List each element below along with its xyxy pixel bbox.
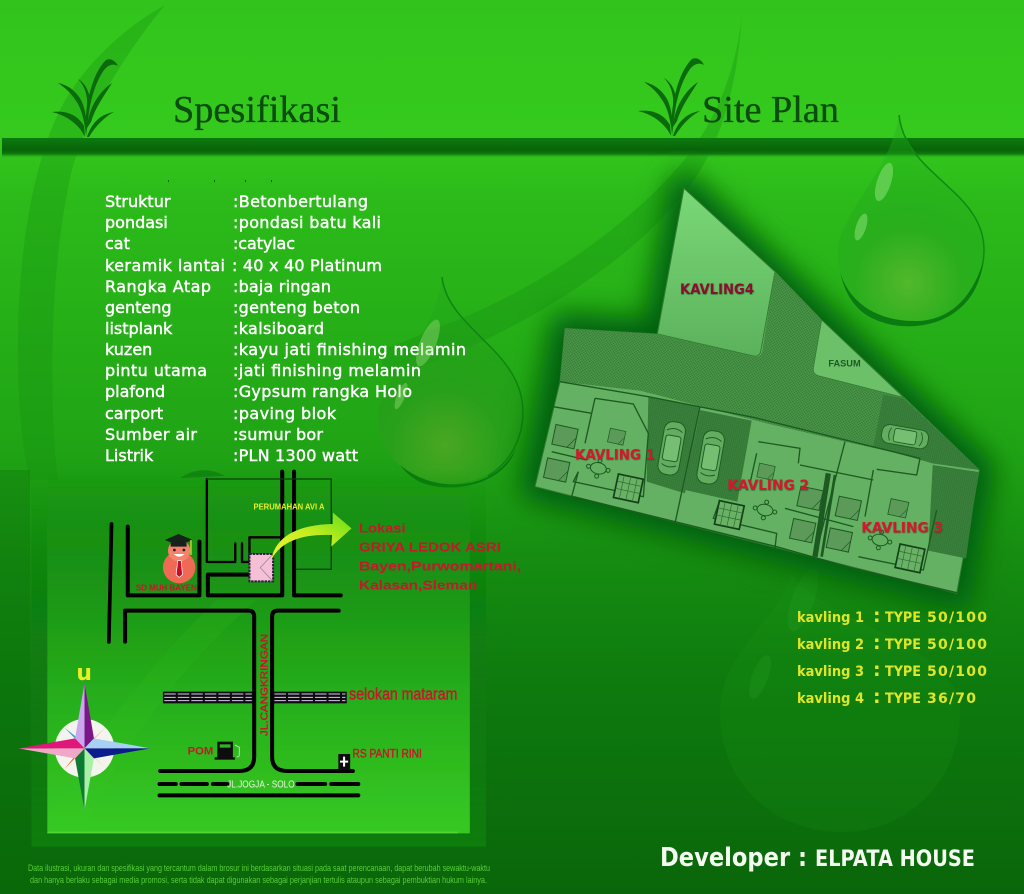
kavling type list: :: [873, 659, 881, 681]
label: selokan mataram: selokan mataram: [349, 684, 457, 703]
specification list: :baja ringan: [233, 277, 331, 296]
icon: graduate mascot school: [163, 534, 195, 583]
header divider bar: [2, 138, 1024, 158]
kavling type list: 50/100: [927, 664, 987, 680]
specification list: :pondasi batu kali: [233, 213, 381, 232]
label: Fasum: FASUM: [828, 359, 861, 369]
paved road: [560, 272, 979, 470]
water drop highlights over text: [392, 317, 445, 410]
kavling type list: TYPE: [885, 664, 921, 680]
kavling type list: kavling 3: [797, 664, 864, 680]
carport areas: [647, 395, 979, 558]
specification list: :genteng beton: [233, 298, 360, 317]
kavling type list: 36/70: [927, 691, 976, 707]
icon: hospital cross: [338, 754, 350, 770]
specification list: keramik lantai: [105, 256, 225, 275]
label: Kavling 3: KAVLING 3: [861, 521, 943, 537]
specification list: pintu utama: [105, 361, 207, 380]
disclaimer: [28, 863, 490, 886]
label: RS Panti Rini: RS PANTI RINI: [353, 747, 422, 761]
label: Kavling 1: KAVLING 1: [575, 447, 655, 463]
panel: site plan: [535, 188, 979, 593]
heading: Spesifikasi: Spesifikasi: [173, 89, 341, 131]
kavling type list: kavling 4: [797, 691, 864, 707]
map backdrop: [31, 470, 486, 847]
specification list: :paving blok: [233, 404, 337, 423]
location text: GRIYA LEDOK ASRI: [359, 539, 501, 554]
label: Jl Cangkringan: JL.CANGKRINGAN: [259, 634, 270, 736]
specification list: listplank: [105, 319, 173, 338]
faint large water drop bottom right: [720, 565, 960, 832]
icon: site location square: [249, 554, 273, 581]
furniture: [544, 425, 925, 573]
kavling type list: :: [873, 605, 881, 627]
kavling type list: TYPE: [885, 637, 921, 653]
specification list: Rangka Atap: [105, 277, 211, 296]
specification list: : 40 x 40 Platinum: [232, 256, 382, 275]
specification list: [105, 192, 466, 465]
kavling type list: 50/100: [927, 610, 987, 626]
specification list: :kayu jati finishing melamin: [233, 340, 466, 359]
developer credit: [660, 843, 975, 873]
cars: [657, 420, 930, 485]
tiny specks above the specification list: [168, 180, 272, 182]
specification list: Struktur: [105, 192, 171, 211]
label: Kavling 2: KAVLING 2: [727, 478, 809, 494]
water drop behind specification list: [378, 277, 523, 487]
specification list: genteng: [105, 298, 172, 317]
location text: Lokasi: [359, 521, 406, 536]
specification list: :Gypsum rangka Holo: [233, 382, 412, 401]
specification list: pondasi: [105, 213, 168, 232]
specification list: :Betonbertulang: [233, 192, 368, 211]
specification list: :jati finishing melamin: [233, 361, 421, 380]
developer credit: ELPATA HOUSE: [815, 847, 975, 872]
disclaimer: Data ilustrasi, ukuran dan spesifikasi yang tercantum dalam brosur ini berdasarkan situasi pada saat perencanaan, dapat berubah sewaktu-waktu: [28, 863, 490, 874]
specification list: :sumur bor: [233, 425, 323, 444]
canal: selokan mataram: [163, 692, 347, 703]
location text: Kalasan,Sleman: [359, 577, 477, 592]
kavling type list: 50/100: [927, 637, 987, 653]
icon: fuel pump: [215, 742, 239, 760]
heading: Site Plan: Site Plan: [702, 89, 839, 131]
specification list: plafond: [105, 382, 165, 401]
specification list: Sumber air: [105, 425, 197, 444]
icon: plant right: [638, 58, 704, 136]
developer credit: Developer :: [660, 843, 807, 873]
specification list: :PLN 1300 watt: [233, 446, 358, 465]
location text: Bayen,Purwomartani,: [359, 558, 521, 573]
house walls: [552, 382, 957, 593]
label: SD Muh Bayen: SD MUH BAYEN: [136, 584, 197, 593]
kavling 4 plot: [657, 188, 775, 356]
road network: [109, 472, 358, 795]
kavling type list: kavling 1: [797, 610, 864, 626]
kavling type list: TYPE: [885, 691, 921, 707]
label: POM: POM: [188, 746, 213, 758]
arrow to location: [271, 513, 352, 559]
compass north label: u: [76, 660, 92, 686]
water drop top right: [838, 115, 984, 326]
label: Jl Jogja Solo: JL.JOGJA - SOLO: [227, 780, 295, 791]
specification list: Listrik: [105, 446, 154, 465]
disclaimer: dan hanya berlaku sebagai media promosi, serta tidak dapat digunakan sebagai perjanjian tertulis ataupun sebagai pembuktian hukum lainya.: [30, 875, 487, 886]
site plan shadow: [535, 188, 979, 593]
fasum plot: [813, 320, 903, 397]
kavling type list: [797, 605, 987, 708]
site plan base: [535, 188, 979, 593]
icon: compass: [19, 683, 150, 810]
kavling type list: :: [873, 632, 881, 654]
specification list: kuzen: [105, 340, 152, 359]
kavling type list: kavling 2: [797, 637, 864, 653]
kavling type list: :: [873, 686, 881, 708]
label: Kavling 4: KAVLING4: [680, 282, 754, 298]
icon: plant left: [52, 59, 118, 137]
specification list: :catylac: [233, 234, 295, 253]
specification list: :kalsiboard: [233, 319, 324, 338]
panel: location map: [19, 470, 521, 847]
decorative leaves and soft shading: [0, 5, 742, 894]
location text: [359, 521, 521, 592]
specification list: carport: [105, 404, 163, 423]
label: Perumahan Avi A: PERUMAHAN AVI A: [253, 502, 324, 512]
specification list: cat: [105, 234, 130, 253]
kavling type list: TYPE: [885, 610, 921, 626]
